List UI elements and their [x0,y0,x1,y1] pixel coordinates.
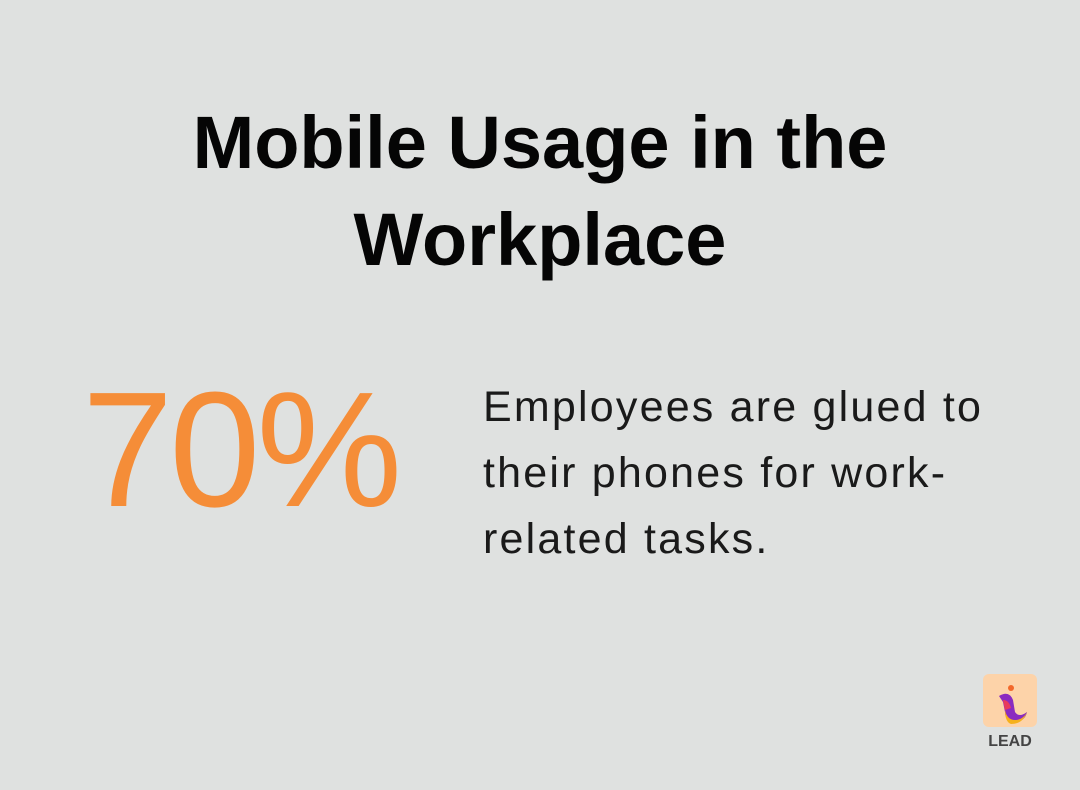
title: Workplace [354,198,726,281]
title: Mobile Usage in the [193,101,887,184]
description text: related tasks. [483,515,770,563]
logo [983,674,1037,748]
description text: Employees are glued to [483,383,983,431]
description text: their phones for work- [483,449,947,497]
big stat: 70% [82,358,398,541]
description text [483,383,983,563]
title [193,101,887,281]
